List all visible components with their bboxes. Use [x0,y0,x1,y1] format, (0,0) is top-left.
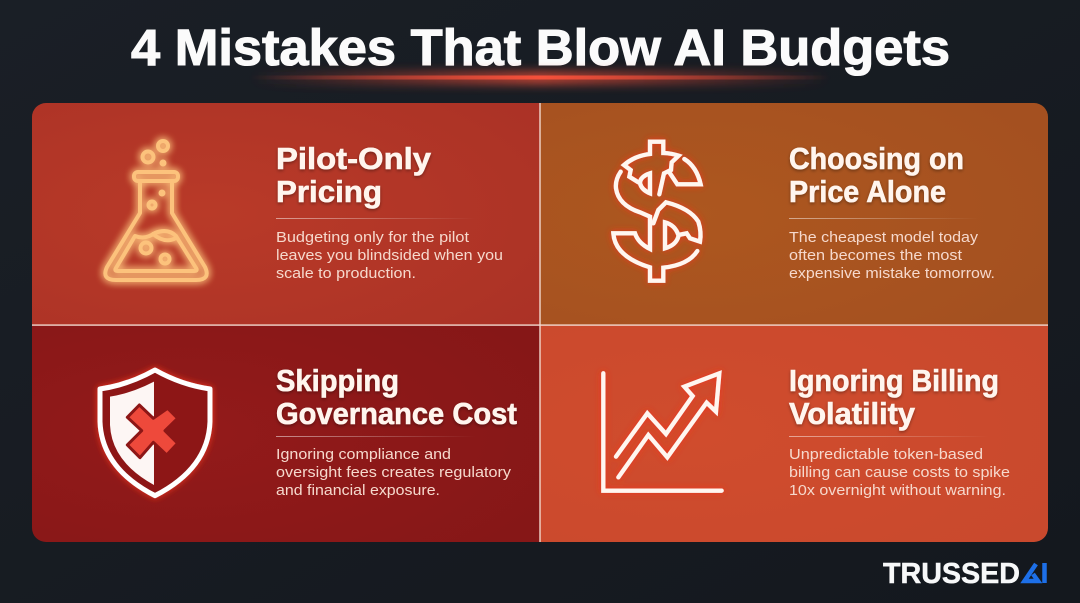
heading: pilot-only pricing [276,141,432,209]
text: billing description [789,447,1010,499]
panel: ignoring billing volatility [540,325,1048,542]
text: governance description: Ignoring compliance and [276,447,451,463]
icon: flask [105,141,207,280]
text: pilot-only description: Budgeting only for the pilot [276,230,469,246]
text: pilot-only description: scale to production. [276,266,416,282]
icon: shield with x [100,370,210,496]
heading: skipping governance cost: Skipping [276,363,399,398]
text: price alone description: often becomes the most [789,248,962,264]
text: governance description: and financial exposure. [276,483,440,499]
heading: ignoring billing volatility: Volatility [789,396,916,431]
icon: logo mark [1024,563,1044,583]
logo: TrussedAI: TRUSSED [883,558,1020,590]
heading: choosing on price alone: Choosing on [789,141,964,176]
text: price alone description: The cheapest model today [789,230,979,246]
panel: choosing on price alone [540,103,1048,325]
heading: pilot-only pricing: Pilot-Only [276,141,432,176]
text: pilot-only description: leaves you blindsided when you [276,248,503,264]
title: 4 Mistakes That Blow AI Budgets [131,19,950,76]
text: billing description: Unpredictable token-based [789,447,983,463]
text: price alone description: expensive mistake tomorrow. [789,266,995,282]
panel grid [32,103,1048,542]
heading: ignoring billing volatility [789,363,999,431]
text: price alone description [789,230,995,282]
heading: choosing on price alone: Price Alone [789,174,946,209]
text: pilot-only description [276,230,503,282]
heading: skipping governance cost [276,368,518,428]
text: governance description: oversight fees creates regulatory [276,465,512,481]
icon: broken dollar [613,142,701,281]
heading: ignoring billing volatility: Ignoring Billing [789,363,999,398]
heading: choosing on price alone [788,146,964,206]
heading: skipping governance cost: Governance Cost [276,396,517,431]
panel: skipping governance cost [32,325,540,542]
text: governance description [276,447,512,499]
heading: pilot-only pricing: Pricing [276,174,382,209]
panel: pilot-only pricing [32,103,540,325]
title underline glow [250,72,830,84]
text: billing description: 10x overnight without warning. [789,483,1006,499]
text: billing description: billing can cause costs to spike [789,465,1010,481]
icon: rising chart arrow [603,373,722,491]
